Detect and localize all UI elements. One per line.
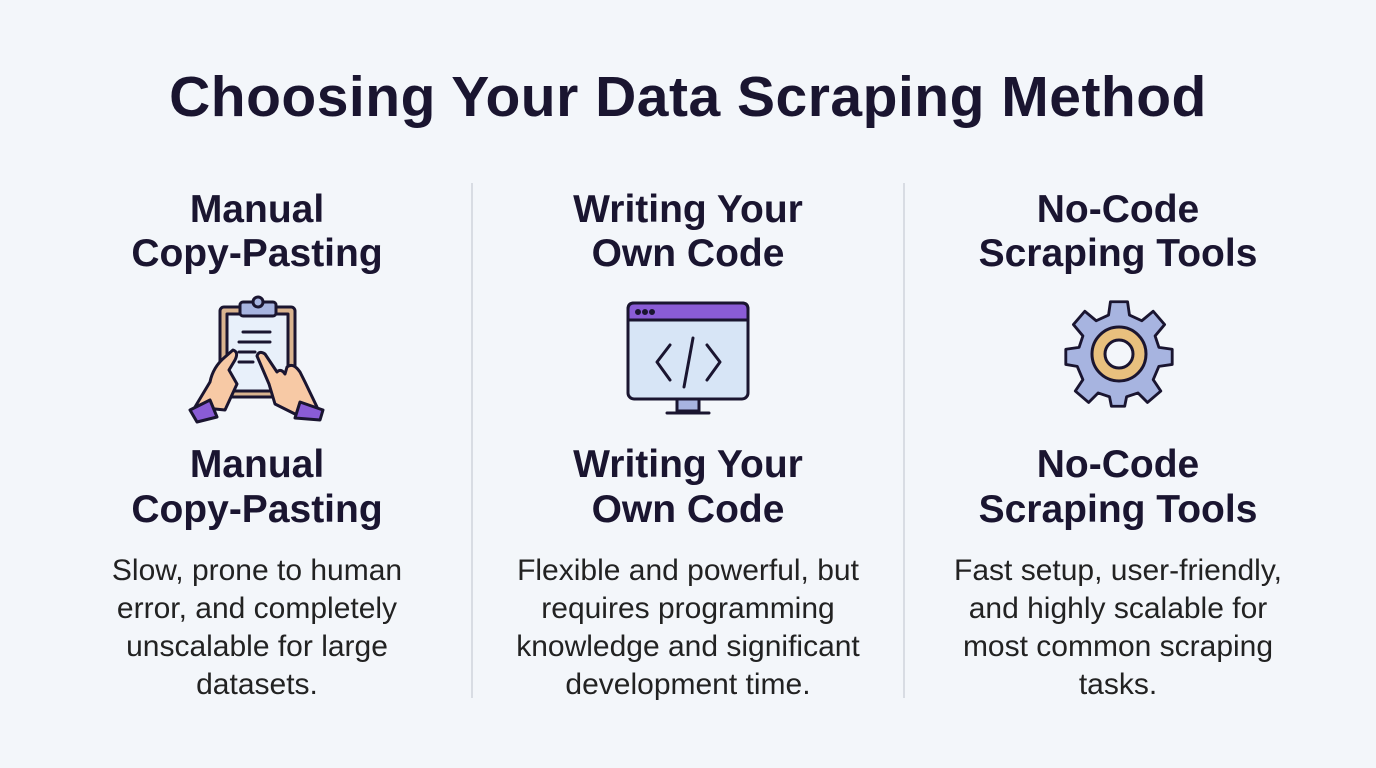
heading repeat: code: Writing Your [573,443,803,486]
text: code [516,554,860,701]
text: no-code [954,554,1282,701]
icon: clipboard with hands [188,296,324,424]
text: code: Flexible and powerful, but [517,554,859,587]
heading repeat: manual [131,443,383,531]
heading: code: Own Code [592,232,784,275]
heading repeat: no-code [979,443,1257,531]
heading: manual: Copy-Pasting [131,232,383,275]
heading: no-code: Scraping Tools [979,232,1257,275]
heading repeat: no-code: No-Code [1037,443,1199,486]
heading repeat: manual: Manual [190,443,324,486]
heading repeat: code [573,443,803,531]
panel: manual copy-pasting [112,188,402,701]
icon: gear [1064,300,1174,408]
heading repeat: manual: Copy-Pasting [131,488,383,531]
heading repeat: no-code: Scraping Tools [979,488,1257,531]
text: manual: datasets. [196,668,318,701]
heading: manual [131,188,383,275]
text: manual: unscalable for large [126,630,388,663]
heading: no-code [979,188,1257,275]
text: code: development time. [565,668,811,701]
text: manual: error, and completely [117,592,397,625]
panel: writing code [516,188,860,701]
text: no-code: and highly scalable for [969,592,1267,625]
heading: code [573,188,803,275]
heading repeat: code: Own Code [592,488,784,531]
text: no-code: most common scraping [963,630,1273,663]
text: no-code: Fast setup, user-friendly, [954,554,1282,587]
text: manual [112,554,402,701]
heading: manual: Manual [190,188,324,231]
title: Choosing Your Data Scraping Method [169,65,1207,129]
text: manual: Slow, prone to human [112,554,402,587]
text: no-code: tasks. [1079,668,1157,701]
text: code: knowledge and significant [516,630,860,663]
icon: monitor with code [626,302,750,414]
heading: no-code: No-Code [1037,188,1199,231]
text: code: requires programming [541,592,835,625]
panel: no-code [954,188,1282,701]
heading: code: Writing Your [573,188,803,231]
